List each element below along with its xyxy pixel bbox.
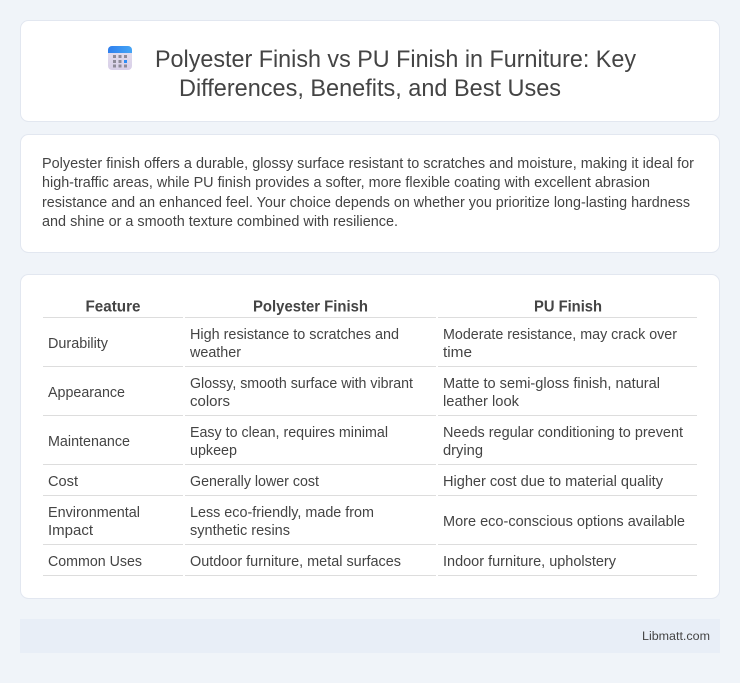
row: appearance: Glossy, smooth surface with vibrant — [190, 376, 413, 392]
row: maintenance: upkeep — [190, 443, 237, 459]
row: durability: weather — [189, 345, 241, 361]
row: appearance: leather look — [443, 394, 520, 410]
summary text: and shine or a smooth texture combined with resilience. — [42, 214, 398, 230]
row: environmental impact — [43, 505, 697, 545]
row: cost: Higher cost due to material quality — [443, 474, 664, 490]
footer bar — [20, 619, 720, 653]
row: maintenance: Needs regular conditioning to prevent — [443, 425, 683, 441]
row: environmental impact: More eco-conscious options available — [443, 514, 685, 530]
row: environmental impact: synthetic resins — [190, 523, 290, 539]
row: cost — [43, 474, 697, 496]
panel: comparison table — [20, 274, 720, 598]
row: maintenance: Maintenance — [48, 434, 130, 450]
title: Differences, Benefits, and Best Uses — [179, 75, 561, 102]
row: maintenance: drying — [443, 443, 483, 459]
row: durability: time — [443, 345, 472, 361]
row: environmental impact: Environmental — [48, 505, 140, 521]
panel: title header — [20, 20, 720, 122]
row: cost: Cost — [48, 474, 78, 490]
row: appearance: Matte to semi-gloss finish, natural — [443, 376, 660, 392]
table header row — [43, 298, 697, 318]
title — [155, 46, 637, 102]
row: appearance — [43, 376, 697, 416]
row: durability — [43, 327, 697, 367]
row: durability: Durability — [48, 336, 109, 352]
row: common uses: Indoor furniture, upholstery — [443, 554, 617, 570]
summary text: resistance and an enhanced feel. Your choice depends on whether you prioritize long-lasting hardness — [42, 195, 690, 211]
summary text — [42, 156, 694, 230]
row: maintenance: Easy to clean, requires minimal — [190, 425, 388, 441]
row: durability: High resistance to scratches and — [190, 327, 399, 343]
table header row: Feature — [86, 298, 141, 316]
row: cost: Generally lower cost — [190, 474, 319, 490]
row: common uses: Common Uses — [48, 554, 142, 570]
table header row: Polyester Finish — [253, 298, 368, 316]
row: common uses: Outdoor furniture, metal surfaces — [190, 554, 401, 570]
table header row: PU Finish — [534, 298, 602, 316]
panel: summary paragraph — [20, 134, 720, 252]
row: maintenance — [43, 425, 697, 465]
row: durability: Moderate resistance, may crack over — [443, 327, 677, 343]
row: environmental impact: Impact — [48, 523, 93, 539]
summary text: Polyester finish offers a durable, glossy surface resistant to scratches and moisture, making it ideal for — [42, 156, 694, 172]
row: appearance: colors — [190, 394, 230, 410]
icon: calendar — [108, 46, 132, 70]
summary text: high-traffic areas, while PU finish provides a softer, more flexible coating with excellent abrasion — [42, 175, 650, 191]
row: environmental impact: Less eco-friendly, made from — [190, 505, 374, 521]
row: common uses — [43, 554, 697, 576]
footer credit: Libmatt.com — [642, 629, 710, 643]
row: appearance: Appearance — [48, 385, 125, 401]
title: Polyester Finish vs PU Finish in Furniture: Key — [155, 46, 637, 73]
